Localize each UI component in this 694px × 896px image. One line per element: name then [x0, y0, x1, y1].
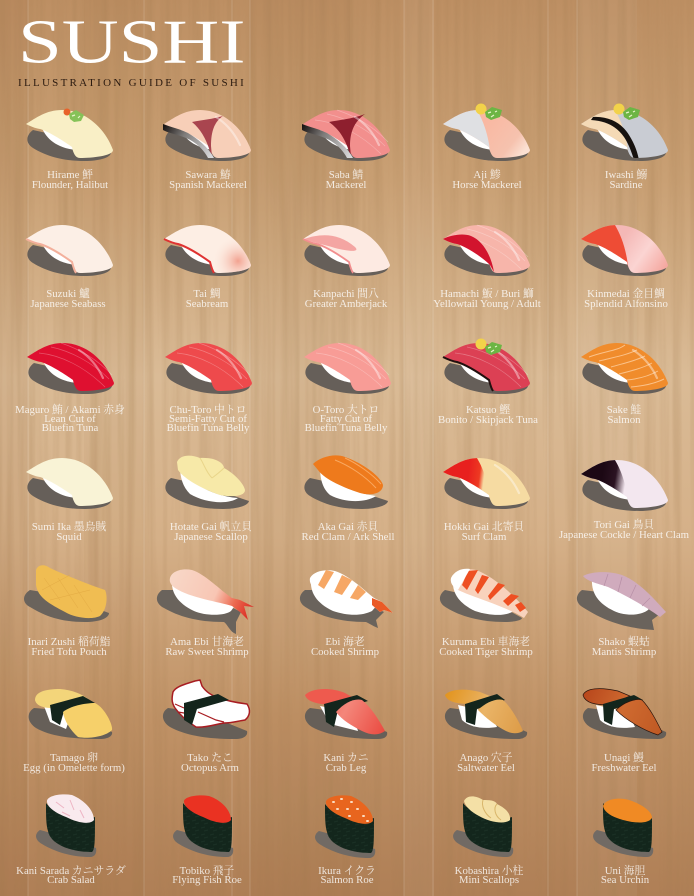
label: Saba: Saba 鯖 — [329, 167, 363, 181]
label: Saba: Mackerel — [326, 179, 366, 191]
item: Ikura — [315, 795, 376, 886]
item: Tai — [164, 225, 251, 307]
illustration: Tako — [163, 680, 249, 739]
label: O-Toro: Bluefin Tuna Belly — [305, 422, 388, 434]
illustration: Katsuo — [443, 338, 530, 394]
label: Unagi: Unagi 鰻 — [604, 751, 644, 764]
item: Katsuo — [438, 338, 538, 426]
label: Tori Gai: Tori Gai 鳥貝 — [594, 518, 654, 531]
label: Inari Zushi: Inari Zushi 稲荷鮨 — [28, 634, 111, 648]
label: Suzuki: Japanese Seabass — [30, 298, 106, 310]
item: Sake — [581, 343, 668, 426]
label: Maguro: Lean Cut of — [44, 413, 96, 425]
item: Hirame — [26, 108, 113, 191]
item: Kanpachi — [303, 225, 390, 310]
label: Inari Zushi: Fried Tofu Pouch — [31, 646, 107, 658]
illustration: Kinmedai — [581, 225, 668, 276]
label: Kanpachi: Kanpachi 間八 — [313, 287, 379, 300]
illustration: Kuruma Ebi — [440, 569, 528, 622]
label: Ikura: Ikura イクラ — [318, 864, 376, 877]
item: Ama Ebi — [157, 569, 254, 658]
label: Hokki Gai: Hokki Gai 北寄貝 — [444, 519, 524, 533]
illustration: Tamago — [29, 689, 112, 739]
illustration: Suzuki — [26, 225, 113, 276]
item: Aka Gai — [302, 455, 394, 543]
illustration: Hamachi — [443, 225, 530, 276]
illustration: Unagi — [583, 689, 666, 739]
label: Kobashira: Mini Scallops — [459, 874, 519, 886]
illustration: Hotate Gai — [165, 456, 249, 509]
illustration: Kanpachi — [303, 225, 390, 276]
label: Unagi: Freshwater Eel — [591, 762, 657, 774]
item: Chu-Toro — [165, 343, 252, 434]
illustration: Saba — [302, 110, 390, 161]
illustration: Chu-Toro — [165, 343, 252, 394]
item: Hamachi — [433, 225, 541, 310]
item: Kinmedai — [581, 225, 668, 310]
label: Uni: Sea Urchin — [601, 874, 650, 886]
illustration: Tobiko — [173, 795, 233, 857]
label: Shako: Mantis Shrimp — [592, 646, 656, 658]
label: Tobiko: Flying Fish Roe — [172, 874, 242, 886]
label: Aka Gai: Aka Gai 赤貝 — [318, 519, 378, 533]
item: Kani Sarada — [16, 794, 126, 886]
illustration: Aka Gai — [304, 455, 388, 509]
label: Kani: Crab Leg — [326, 762, 367, 774]
label: Tai: Seabream — [186, 298, 229, 310]
label: Iwashi: Sardine — [610, 179, 643, 191]
subtitle: ILLUSTRATION GUIDE OF SUSHI — [18, 77, 246, 89]
item: Hotate Gai — [165, 456, 252, 543]
label: Sawara: Sawara 鰆 — [185, 168, 231, 181]
illustration: Aji — [443, 104, 530, 161]
label: Aka Gai: Red Clam / Ark Shell — [302, 531, 394, 543]
label: Aji: Horse Mackerel — [452, 179, 522, 191]
label: Aji: Aji 鯵 — [473, 168, 501, 181]
label: Uni: Uni 海胆 — [605, 864, 645, 877]
item: Inari Zushi — [24, 565, 111, 658]
label: Kani Sarada: Crab Salad — [47, 874, 95, 886]
label: Katsuo: Bonito / Skipjack Tuna — [438, 414, 538, 426]
illustration: Shako — [577, 572, 666, 630]
illustration: Kobashira — [453, 796, 513, 857]
label: Sake: Salmon — [608, 414, 641, 426]
item: Tamago — [23, 689, 125, 774]
illustration: Ama Ebi — [157, 569, 254, 634]
item: Unagi — [583, 689, 666, 774]
label: Sumi Ika: Squid — [56, 531, 82, 543]
item: Shako — [577, 572, 666, 658]
label: Ama Ebi: Ama Ebi 甘海老 — [170, 634, 244, 648]
item: Ebi — [300, 570, 393, 658]
title: SUSHI — [18, 8, 246, 76]
illustration: Inari Zushi — [24, 565, 109, 622]
label: Chu-Toro: Semi-Fatty Cut of — [169, 413, 247, 425]
label: Kani: Kani カニ — [323, 751, 369, 764]
item: Iwashi — [581, 104, 668, 188]
illustration: Maguro — [27, 343, 114, 394]
item: Tori Gai — [559, 460, 689, 540]
label: Hirame: Hirame 鮃 — [47, 168, 93, 181]
illustration: Anago — [445, 690, 527, 739]
label: Kuruma Ebi: Cooked Tiger Shrimp — [439, 646, 533, 658]
item: Uni — [593, 799, 653, 886]
label: Chu-Toro: Bluefin Tuna Belly — [167, 422, 250, 434]
label: Suzuki: Suzuki 鱸 — [46, 286, 90, 300]
label: Ebi: Cooked Shrimp — [311, 646, 379, 658]
label: Kuruma Ebi: Kuruma Ebi 車海老 — [442, 634, 530, 648]
label: Tako: Octopus Arm — [181, 762, 240, 774]
label: Sawara: Spanish Mackerel — [169, 179, 247, 191]
item: Sawara — [163, 110, 251, 191]
label: Ebi: Ebi 海老 — [325, 634, 365, 648]
item: Suzuki — [26, 225, 113, 310]
item: Saba — [302, 110, 390, 191]
item: Kuruma Ebi — [439, 569, 533, 658]
item: Tako — [163, 680, 249, 774]
illustration: Sawara — [163, 110, 251, 161]
label: Kinmedai: Splendid Alfonsino — [584, 298, 668, 310]
label: Maguro: Bluefin Tuna — [42, 422, 99, 434]
label: Maguro: Maguro 鮪 / Akami 赤身 — [15, 402, 125, 416]
label: Hotate Gai: Japanese Scallop — [174, 531, 248, 543]
illustration: Sake — [581, 343, 668, 394]
illustration: Ikura — [315, 795, 375, 858]
label: Tai: Tai 鯛 — [193, 287, 221, 300]
label: Iwashi: Iwashi 鰯 — [605, 168, 647, 181]
label: Sumi Ika: Sumi Ika 墨烏賊 — [32, 519, 106, 533]
illustration: Tori Gai — [581, 460, 668, 511]
label: Tobiko: Tobiko 飛子 — [180, 864, 235, 877]
label: Hotate Gai: Hotate Gai 帆立貝 — [170, 519, 252, 533]
label: Hamachi: Yellowtail Young / Adult — [433, 298, 541, 310]
label: Ikura: Salmon Roe — [320, 874, 374, 886]
label: Tamago: Tamago 卵 — [50, 751, 98, 764]
item: Aji — [443, 104, 530, 188]
illustration: Kani — [305, 689, 387, 739]
illustration: Ebi — [300, 570, 393, 628]
illustration: Hokki Gai — [443, 458, 530, 509]
illustration: Hirame — [26, 108, 113, 161]
label: Anago: Saltwater Eel — [457, 762, 515, 774]
item: Hokki Gai — [443, 458, 530, 540]
illustration: Uni — [593, 799, 653, 857]
label: Tamago: Egg (in Omelette form) — [23, 762, 125, 774]
label: Sake: Sake 鮭 — [607, 402, 641, 416]
item: Sumi Ika — [26, 458, 113, 543]
label: Hirame: Flounder, Halibut — [32, 179, 108, 191]
label: Tako: Tako たこ — [187, 751, 233, 764]
label: Chu-Toro: Chu-Toro 中トロ — [170, 402, 246, 416]
item: Anago — [445, 690, 527, 774]
label: Anago: Anago 穴子 — [459, 750, 513, 764]
label: Hamachi: Hamachi 魬 / Buri 鰤 — [440, 287, 534, 300]
illustration: Iwashi — [581, 104, 668, 161]
label: Ama Ebi: Raw Sweet Shrimp — [165, 646, 249, 658]
label: Kani Sarada: Kani Sarada カニサラダ — [16, 864, 126, 877]
item: O-Toro — [304, 343, 391, 434]
label: O-Toro: Fatty Cut of — [320, 413, 372, 425]
item: Tobiko — [172, 795, 242, 886]
label: O-Toro: O-Toro 大トロ — [313, 402, 379, 416]
item: Maguro — [15, 343, 125, 434]
illustration: Kani Sarada — [36, 794, 96, 857]
label: Kanpachi: Greater Amberjack — [305, 298, 388, 310]
label: Tori Gai: Japanese Cockle / Heart Clam — [559, 529, 690, 541]
label: Kinmedai: Kinmedai 金目鯛 — [587, 286, 665, 300]
illustration: Sumi Ika — [26, 458, 113, 509]
illustration: O-Toro — [304, 343, 391, 394]
label: Kobashira: Kobashira 小柱 — [455, 863, 524, 877]
label: Shako: Shako 蝦蛄 — [598, 634, 650, 648]
label: Katsuo: Katsuo 鰹 — [466, 403, 510, 416]
item: Kani — [305, 689, 387, 774]
item: Kobashira — [453, 796, 524, 886]
label: Hokki Gai: Surf Clam — [462, 531, 507, 543]
illustration: Tai — [164, 225, 251, 276]
